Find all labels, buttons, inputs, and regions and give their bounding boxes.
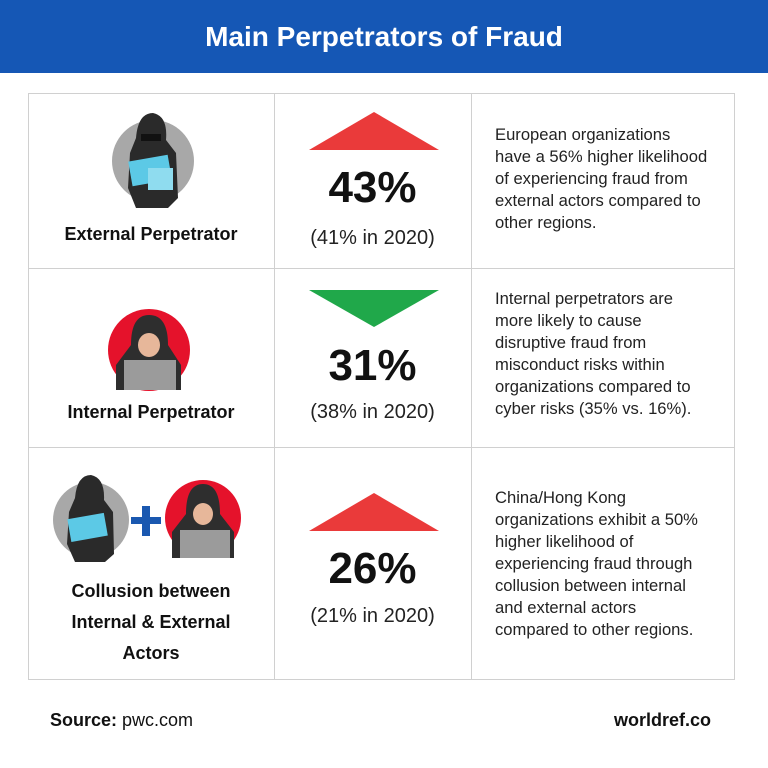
stat 43%: 43% <box>328 163 417 212</box>
desc row2: more likely to cause <box>495 311 642 330</box>
desc row1: external actors compared to <box>495 191 701 210</box>
brand: worldref.co <box>614 710 711 730</box>
desc row2: misconduct risks within <box>495 355 665 374</box>
desc row3: higher likelihood of <box>495 532 633 551</box>
label: collusion: Internal & External <box>71 612 231 632</box>
sub 41%: (41% in 2020) <box>310 227 435 249</box>
desc row3: China/Hong Kong <box>495 488 626 507</box>
label: collusion <box>71 581 231 663</box>
stat 26%: 26% <box>328 544 417 593</box>
desc row1: have a 56% higher likelihood <box>495 147 707 166</box>
desc row3: experiencing fraud through <box>495 554 692 573</box>
desc row2: organizations compared to <box>495 377 691 396</box>
label: external: External Perpetrator <box>64 224 238 244</box>
arrow: up red row3 <box>309 493 439 531</box>
table grid <box>28 93 735 680</box>
desc row3 <box>495 488 698 639</box>
desc row3: and external actors <box>495 598 636 617</box>
desc row3: compared to other regions. <box>495 620 693 639</box>
sub 38%: (38% in 2020) <box>310 401 435 423</box>
desc row1 <box>495 125 707 232</box>
desc row1: European organizations <box>495 125 670 144</box>
source: Source: pwc.com <box>50 710 193 730</box>
icon: collusion <box>53 475 241 562</box>
desc row2: cyber risks (35% vs. 16%). <box>495 399 691 418</box>
desc row1: other regions. <box>495 213 596 232</box>
label: collusion: Actors <box>122 643 180 663</box>
icon: internal perpetrator <box>108 309 190 391</box>
desc row1: of experiencing fraud from <box>495 169 688 188</box>
label: internal: Internal Perpetrator <box>67 402 235 422</box>
desc row3: collusion between internal <box>495 576 686 595</box>
arrow: up red row1 <box>309 112 439 150</box>
desc row2: Internal perpetrators are <box>495 289 673 308</box>
desc row3: organizations exhibit a 50% <box>495 510 698 529</box>
stat 31%: 31% <box>328 341 417 390</box>
sub 21%: (21% in 2020) <box>310 605 435 627</box>
desc row2 <box>495 289 691 418</box>
header: Main Perpetrators of Fraud <box>205 21 563 52</box>
arrow: down green row2 <box>309 290 439 327</box>
icon: external perpetrator <box>112 113 194 208</box>
header <box>0 0 768 73</box>
desc row2: disruptive fraud from <box>495 333 646 352</box>
label: collusion: Collusion between <box>71 581 230 601</box>
